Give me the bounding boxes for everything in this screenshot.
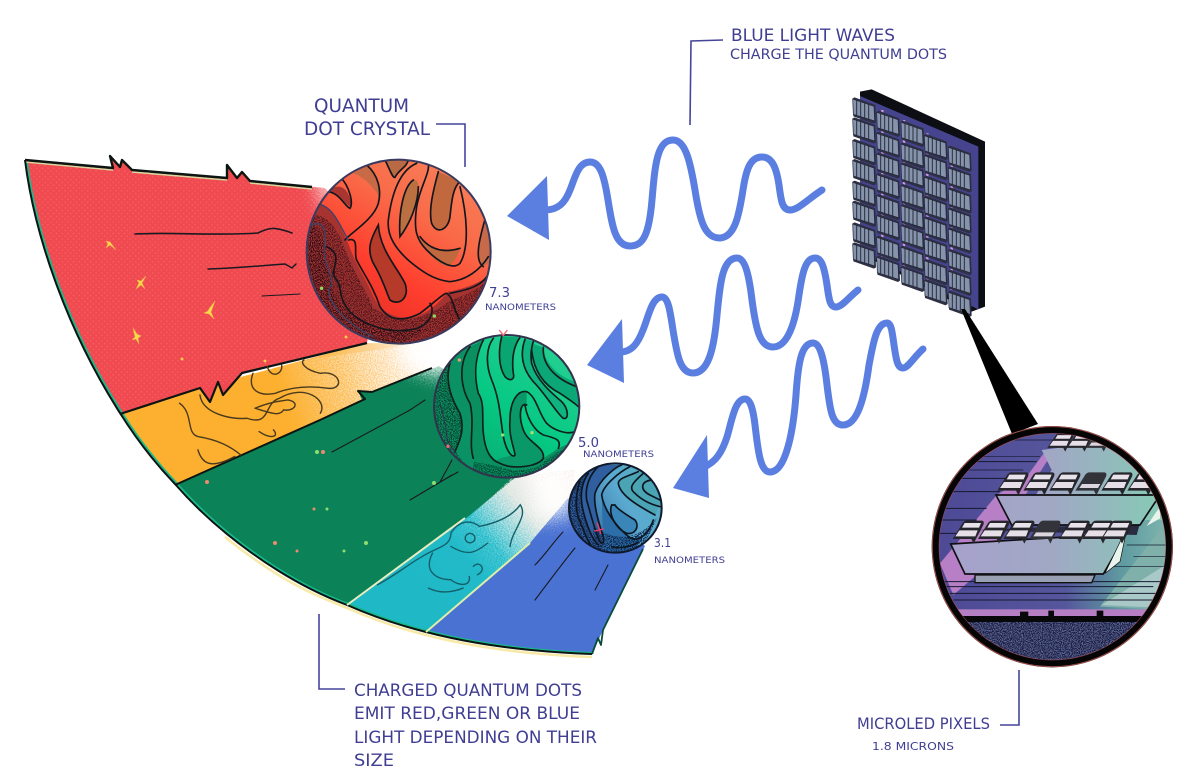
pink column stripes (882, 110, 952, 290)
label: 3.1 nanometers (654, 536, 725, 566)
band: teal (347, 470, 570, 632)
label: charged quantum dots: CHARGED QUANTUM DOTS (354, 681, 582, 701)
yellow squiggles (180, 360, 339, 464)
band: teal grain (440, 470, 575, 580)
label: 5.0 nanometers: 5.0 (578, 436, 599, 451)
motion streaks (135, 228, 608, 600)
floor speckle (968, 622, 1137, 660)
pink stripe (953, 609, 1153, 617)
microLED panel (853, 89, 985, 317)
shelf bottom (975, 575, 1095, 583)
sphere: green quantum dot (430, 330, 582, 483)
pointer: panel to magnifier (961, 309, 1038, 434)
label: charged quantum dots: EMIT RED,GREEN OR BLUE (354, 704, 580, 724)
label: blue light waves (690, 26, 947, 125)
label: 3.1 nanometers: NANOMETERS (654, 556, 725, 566)
band: red (25, 156, 380, 415)
shelf middle (980, 526, 1140, 535)
label: quantum dot crystal: DOT CRYSTAL (304, 118, 430, 140)
band: green (175, 366, 520, 605)
label: charged quantum dots: SIZE (354, 751, 394, 771)
arrow: blue wave 2 (587, 258, 858, 383)
light wedge diagram (25, 156, 645, 657)
band: blue (426, 498, 645, 654)
band: yellow grain (270, 340, 445, 432)
arrow: blue wave 1 (507, 140, 822, 246)
sphere: red quantum dot (306, 158, 492, 345)
label: blue light waves: BLUE LIGHT WAVES (731, 26, 895, 46)
sphere: blue quantum dot (567, 463, 663, 555)
sparkles: green band (205, 450, 436, 552)
label: 5.0 nanometers: NANOMETERS (583, 450, 654, 460)
panel body (860, 89, 985, 312)
band: yellow (120, 343, 445, 485)
label: microLED pixels: 1.8 MICRONS (872, 740, 954, 753)
teal squiggles (377, 505, 523, 592)
shelf top (1036, 446, 1162, 520)
scan lines (940, 440, 1173, 600)
halftone: red band (25, 160, 380, 415)
label: 7.3 nanometers (485, 286, 556, 313)
label: microLED pixels (857, 670, 1019, 753)
teal reflections (1100, 529, 1166, 608)
arrow: blue wave 3 (673, 323, 923, 498)
outlines: wedge edges (25, 156, 643, 657)
label: 5.0 nanometers (578, 436, 654, 460)
label: quantum dot crystal: QUANTUM (314, 95, 409, 117)
label: 3.1 nanometers: 3.1 (654, 536, 671, 550)
label: charged quantum dots: LIGHT DEPENDING ON THEIR (354, 728, 597, 748)
label: microLED pixels: MICROLED PIXELS (857, 714, 990, 733)
fade: white grain (318, 170, 575, 520)
label: blue light waves: CHARGE THE QUANTUM DOTS (730, 47, 947, 63)
lens background (933, 430, 1173, 663)
pink diagonal (940, 452, 1050, 595)
label: 7.3 nanometers: 7.3 (489, 286, 510, 301)
label: charged quantum dots (319, 614, 597, 771)
magnifier: zoomed pixels (932, 426, 1183, 667)
sparkles: red band (106, 241, 347, 362)
label: quantum dot crystal (304, 95, 465, 167)
label: 7.3 nanometers: NANOMETERS (485, 303, 556, 313)
pixel tile grid (853, 97, 972, 317)
